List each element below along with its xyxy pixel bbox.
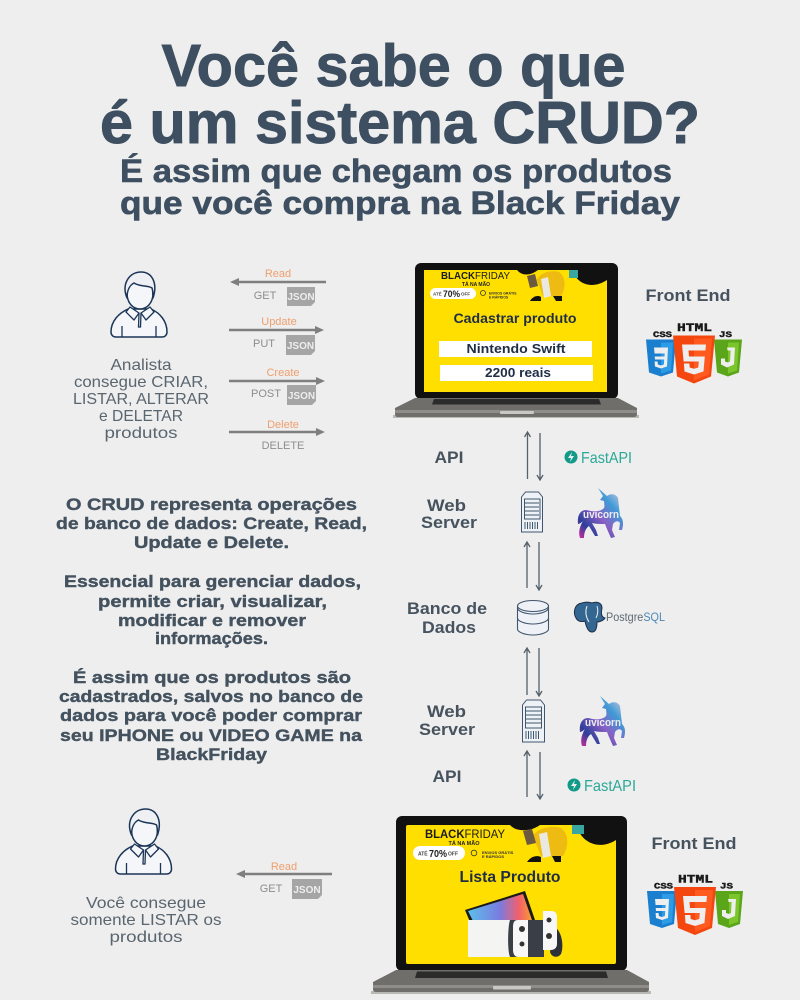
store banner: BLACKFRIDAY bbox=[441, 270, 510, 282]
Black Friday example: É assim que os produtos são bbox=[73, 668, 351, 687]
form field: price bbox=[440, 365, 593, 381]
store banner: TÁ NA MÃO bbox=[462, 281, 490, 288]
FastAPI logo bottom: FastAPI bbox=[584, 778, 636, 795]
icon: CSS HTML JS logos bottom: HTML bbox=[678, 874, 714, 886]
arrow: customer read request bbox=[236, 861, 332, 899]
arrow: read request: Read bbox=[265, 268, 291, 280]
arrow: delete request: Delete bbox=[267, 419, 299, 431]
arrow: create request: POST bbox=[251, 388, 281, 400]
arrows: server to database bbox=[524, 542, 542, 590]
web server label top: Web bbox=[427, 496, 466, 515]
API label top: API bbox=[434, 448, 464, 467]
front end label bottom: Front End bbox=[652, 834, 736, 853]
arrow: customer read request: JSON bbox=[293, 885, 321, 896]
uvicorn logo top: uvicorn bbox=[583, 509, 619, 521]
icon: CSS HTML JS logos top: HTML bbox=[677, 323, 713, 335]
web server label top bbox=[421, 496, 477, 532]
title: Você sabe o que bbox=[162, 33, 626, 99]
store banner: ATÉ bbox=[433, 290, 442, 296]
form field: product name bbox=[439, 341, 592, 357]
database label bbox=[407, 599, 487, 637]
FastAPI logo top: FastAPI bbox=[581, 450, 632, 467]
subtitle: É assim que chegam os produtos bbox=[120, 152, 672, 189]
icon: CSS HTML JS logos top bbox=[646, 323, 742, 384]
arrow: delete request bbox=[229, 419, 325, 452]
store banner: E RÁPIDOS bbox=[489, 294, 509, 300]
analyst description: consegue CRIAR, bbox=[74, 374, 208, 391]
uvicorn logo top bbox=[578, 488, 623, 538]
CRUD definition: O CRUD representa operações bbox=[66, 495, 357, 514]
web server label bottom: Web bbox=[427, 702, 466, 721]
API label bottom: API bbox=[432, 767, 462, 786]
icon: analyst person bbox=[111, 272, 167, 337]
analyst description bbox=[73, 357, 209, 442]
store banner: ENVIOS GRÁTIS bbox=[482, 850, 514, 855]
icon: web server bottom bbox=[522, 700, 544, 742]
store banner: TÁ NA MÃO bbox=[449, 840, 480, 847]
laptop: product list screen bbox=[371, 816, 651, 994]
analyst description: produtos bbox=[104, 425, 178, 442]
store banner: ATÉ bbox=[418, 850, 428, 858]
arrow: update request: Update bbox=[261, 316, 297, 328]
arrow: create request bbox=[229, 367, 325, 405]
arrows: database to server bbox=[524, 648, 542, 696]
store banner: 70% bbox=[429, 849, 447, 860]
arrow: customer read request: Read bbox=[271, 861, 297, 873]
arrows: front end to API bbox=[524, 432, 543, 480]
icon: web server top bbox=[522, 492, 542, 532]
icon: CSS HTML JS logos bottom bbox=[647, 874, 743, 935]
Black Friday example: seu IPHONE ou VIDEO GAME na bbox=[60, 726, 363, 745]
laptop: product registration screen bbox=[393, 263, 639, 418]
arrow: read request: JSON bbox=[287, 292, 315, 303]
product image: game console bbox=[465, 891, 562, 957]
store banner: OFF bbox=[461, 292, 470, 296]
arrow: update request bbox=[229, 316, 324, 355]
store banner: OFF bbox=[448, 852, 458, 858]
uvicorn logo bottom: uvicorn bbox=[585, 717, 621, 729]
customer description bbox=[70, 895, 222, 946]
arrow: create request: Create bbox=[266, 367, 300, 379]
database label: Dados bbox=[422, 618, 476, 637]
store banner: BLACKFRIDAY bbox=[425, 827, 505, 841]
arrow: update request: JSON bbox=[287, 341, 314, 352]
icon: CSS HTML JS logos bottom: JS bbox=[720, 882, 733, 892]
Black Friday example: dados para você poder comprar bbox=[60, 706, 362, 725]
icon: CSS HTML JS logos top: CSS bbox=[653, 331, 672, 340]
arrow: customer read request: GET bbox=[260, 883, 283, 895]
arrow: read request: GET bbox=[254, 290, 277, 302]
store banner: ENVIOS GRÁTIS bbox=[489, 290, 517, 296]
icon: CSS HTML JS logos bottom: CSS bbox=[654, 882, 673, 892]
customer description: Você consegue bbox=[86, 895, 206, 912]
icon: customer person bbox=[116, 809, 172, 874]
store banner bbox=[430, 270, 607, 301]
arrow: read request bbox=[230, 268, 326, 306]
store banner: 70% bbox=[443, 289, 460, 299]
subtitle: que você compra na Black Friday bbox=[120, 185, 680, 221]
product list heading: Lista Produto bbox=[460, 869, 561, 886]
icon: database bbox=[518, 600, 548, 635]
FastAPI logo top bbox=[564, 450, 632, 467]
Black Friday example: cadastrados, salvos no banco de bbox=[59, 687, 363, 706]
arrow: create request: JSON bbox=[288, 391, 315, 402]
database label: Banco de bbox=[407, 599, 487, 618]
subtitle bbox=[120, 152, 680, 221]
form field: product name: Nintendo Swift bbox=[466, 341, 566, 356]
Black Friday example bbox=[59, 668, 363, 764]
title: é um sistema CRUD? bbox=[100, 90, 700, 156]
store banner: E RÁPIDOS bbox=[482, 854, 504, 859]
web server label bottom: Server bbox=[419, 720, 475, 739]
uvicorn logo bottom bbox=[580, 696, 625, 746]
title bbox=[100, 33, 700, 156]
arrow: delete request: DELETE bbox=[262, 440, 304, 452]
why it matters: informações. bbox=[155, 629, 268, 648]
CRUD definition bbox=[56, 495, 367, 552]
analyst description: LISTAR, ALTERAR bbox=[73, 391, 209, 408]
why it matters: Essencial para gerenciar dados, bbox=[64, 572, 361, 591]
analyst description: Analista bbox=[110, 357, 172, 374]
explanatory text block bbox=[56, 495, 367, 764]
store banner bbox=[413, 825, 616, 862]
PostgreSQL logo: PostgreSQL bbox=[606, 610, 665, 624]
form field: price: 2200 reais bbox=[485, 365, 551, 380]
customer description: somente LISTAR os bbox=[70, 912, 222, 929]
icon: CSS HTML JS logos top: JS bbox=[719, 331, 732, 340]
why it matters: modificar e remover bbox=[118, 611, 306, 630]
CRUD definition: Update e Delete. bbox=[134, 533, 289, 552]
CRUD definition: de banco de dados: Create, Read, bbox=[56, 514, 367, 533]
form heading: Cadastrar produto bbox=[454, 310, 576, 326]
arrows: API to front end bbox=[524, 751, 543, 799]
analyst description: e DELETAR bbox=[99, 408, 183, 425]
arrow: update request: PUT bbox=[253, 338, 275, 350]
Black Friday example: BlackFriday bbox=[156, 745, 268, 764]
why it matters bbox=[64, 572, 361, 648]
front end label top: Front End bbox=[646, 286, 730, 305]
why it matters: permite criar, visualizar, bbox=[98, 592, 327, 611]
web server label bottom bbox=[419, 702, 475, 739]
web server label top: Server bbox=[421, 513, 477, 532]
customer description: produtos bbox=[110, 929, 182, 946]
PostgreSQL logo bbox=[574, 602, 665, 632]
